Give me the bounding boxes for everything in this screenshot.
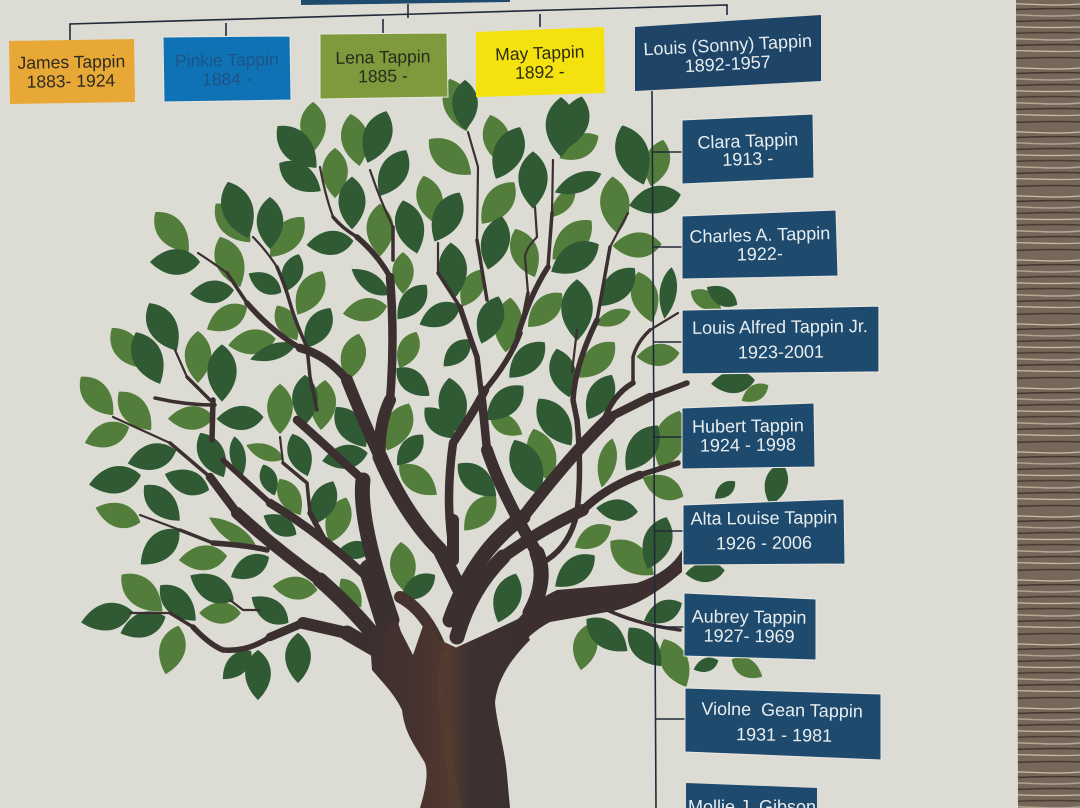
top parent box, cropped	[301, 0, 510, 5]
box: Mollie J. Gibson, cropped	[686, 783, 817, 808]
box: Aubrey Tappin	[684, 593, 816, 660]
box: Alta Louise Tappin	[683, 499, 845, 565]
box: James Tappin: 1883- 1924	[26, 70, 116, 92]
box: Pinkie Tappin: Pinkie Tappin	[175, 49, 279, 71]
box: Violne Gean Tappin: Violne Gean Tappin	[701, 699, 863, 721]
sibling bracket	[70, 4, 727, 40]
child trunk line and ticks	[652, 91, 685, 808]
box: Aubrey Tappin: 1927- 1969	[703, 626, 795, 646]
box: Pinkie Tappin: 1884 -	[202, 69, 252, 89]
box: Louis Alfred Tappin Jr.	[682, 306, 879, 374]
main right limb and trunk	[370, 550, 682, 808]
box: Louis (Sonny) Tappin	[635, 15, 821, 91]
box: Alta Louise Tappin: 1926 - 2006	[716, 532, 812, 554]
box: Clara Tappin: 1913 -	[722, 148, 774, 170]
box: Clara Tappin: Clara Tappin	[697, 129, 798, 153]
box: James Tappin	[9, 39, 135, 104]
box: May Tappin: 1892 -	[515, 61, 565, 83]
box: Pinkie Tappin	[163, 36, 291, 102]
box: Charles A. Tappin	[682, 210, 838, 279]
connector lines	[70, 4, 727, 808]
box: Clara Tappin	[682, 114, 814, 184]
box: Violne Gean Tappin	[685, 688, 881, 760]
box: Charles A. Tappin: 1922-	[737, 243, 783, 265]
box: Lena Tappin: 1885 -	[358, 66, 408, 86]
branches	[113, 132, 687, 655]
tree illustration	[71, 74, 793, 808]
box: Hubert Tappin	[682, 403, 815, 469]
box: May Tappin: May Tappin	[495, 41, 585, 65]
box: Louis Alfred Tappin Jr.: Louis Alfred Tappin Jr.	[692, 316, 868, 338]
box: James Tappin: James Tappin	[17, 51, 125, 73]
box: May Tappin	[476, 27, 605, 97]
box: Lena Tappin: Lena Tappin	[335, 46, 431, 68]
leaves: mid green	[71, 74, 772, 693]
box: Violne Gean Tappin: 1931 - 1981	[736, 724, 832, 746]
box: Alta Louise Tappin: Alta Louise Tappin	[690, 507, 837, 529]
box: Aubrey Tappin: Aubrey Tappin	[692, 606, 807, 628]
box: Louis (Sonny) Tappin: 1892-1957	[684, 52, 771, 76]
leaves: dark green	[78, 80, 793, 700]
box: Louis (Sonny) Tappin: Louis (Sonny) Tappin	[643, 31, 812, 59]
box: Louis Alfred Tappin Jr.: 1923-2001	[738, 342, 824, 362]
box: Charles A. Tappin: Charles A. Tappin	[689, 223, 830, 247]
box: Hubert Tappin: 1924 - 1998	[700, 434, 796, 456]
textured wall at right	[1016, 0, 1080, 808]
box: Lena Tappin	[320, 33, 448, 99]
box: Hubert Tappin: Hubert Tappin	[692, 415, 804, 437]
